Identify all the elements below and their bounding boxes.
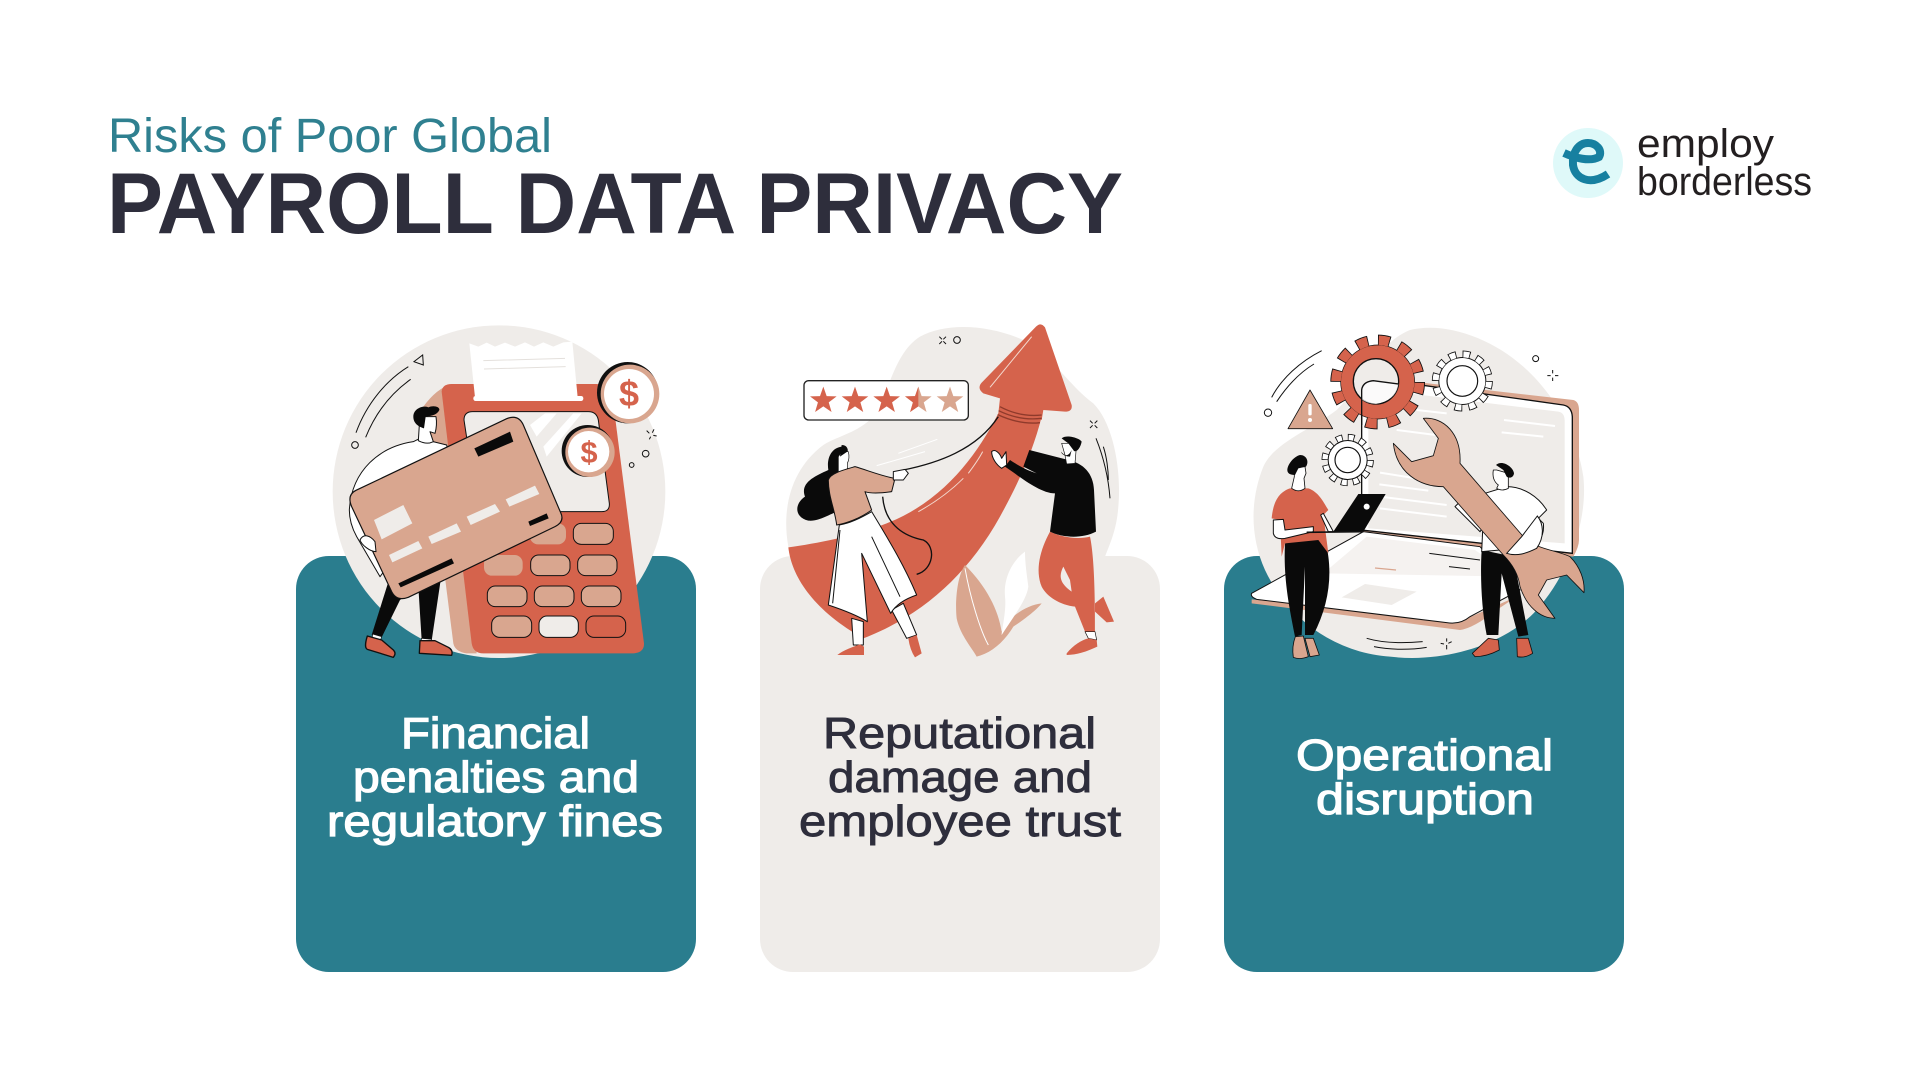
leaves bbox=[956, 552, 1042, 657]
card text: penalties and bbox=[353, 753, 639, 802]
illustration: arrow, rating and people bbox=[786, 324, 1119, 657]
main title: PAYROLL DATA PRIVACY bbox=[107, 156, 1123, 252]
card text bbox=[799, 709, 1121, 846]
icon: coin large bbox=[597, 362, 659, 423]
logo: employ borderless bbox=[1553, 122, 1812, 204]
panel: operational disruption bbox=[1224, 328, 1624, 972]
logo wordmark: borderless bbox=[1637, 160, 1812, 204]
receipt bbox=[469, 342, 583, 401]
icon: coin small bbox=[562, 425, 615, 477]
calculator bbox=[423, 384, 644, 653]
icon: white gear top right bbox=[1436, 354, 1489, 408]
card text: Financial bbox=[401, 709, 590, 758]
large laptop bbox=[1251, 377, 1579, 630]
credit card bbox=[350, 417, 562, 599]
decorative marks bbox=[939, 337, 1097, 428]
rating box with stars bbox=[804, 381, 968, 420]
illustration: gears, laptop, wrench and people bbox=[1251, 328, 1584, 659]
icon: coin small: $ bbox=[580, 436, 598, 470]
card text: damage and bbox=[828, 753, 1092, 802]
hand bbox=[360, 536, 376, 552]
card text bbox=[327, 709, 663, 846]
person holding credit card bbox=[349, 406, 453, 657]
card text bbox=[1296, 731, 1553, 824]
card text: employee trust bbox=[799, 797, 1121, 846]
card text: regulatory fines bbox=[327, 797, 663, 846]
card text: Operational bbox=[1296, 731, 1553, 780]
card text: disruption bbox=[1316, 775, 1534, 824]
person with laptop bbox=[1272, 455, 1386, 659]
card background bbox=[296, 556, 696, 972]
rope and motion lines bbox=[877, 417, 1110, 574]
panel: financial penalties bbox=[296, 325, 696, 972]
heading: title block bbox=[107, 110, 1123, 252]
icon: logo circle bbox=[1553, 128, 1623, 198]
decorative marks bbox=[1264, 351, 1558, 649]
woman pulling rope bbox=[797, 445, 922, 657]
forearm over wrench bbox=[1507, 516, 1542, 555]
growth arrow bbox=[788, 324, 1072, 638]
illustration: calculator, card and person bbox=[333, 325, 665, 658]
person holding wrench bbox=[1455, 463, 1547, 657]
icon: red gear bbox=[1336, 340, 1419, 425]
panel: reputational damage bbox=[760, 324, 1160, 972]
card text: Reputational bbox=[823, 709, 1096, 758]
logo wordmark: employ bbox=[1637, 122, 1774, 166]
icon: coin large: $ bbox=[619, 373, 639, 414]
icon: white gear lower bbox=[1325, 437, 1370, 483]
subtitle: Risks of Poor Global bbox=[108, 110, 552, 163]
logo wordmark bbox=[1637, 122, 1812, 204]
icon: wrench bbox=[1393, 418, 1584, 618]
card background bbox=[1224, 556, 1624, 972]
card background bbox=[760, 556, 1160, 972]
warning triangle bbox=[1288, 390, 1333, 429]
decorative marks bbox=[352, 355, 657, 467]
man pushing arrow bbox=[992, 437, 1114, 655]
